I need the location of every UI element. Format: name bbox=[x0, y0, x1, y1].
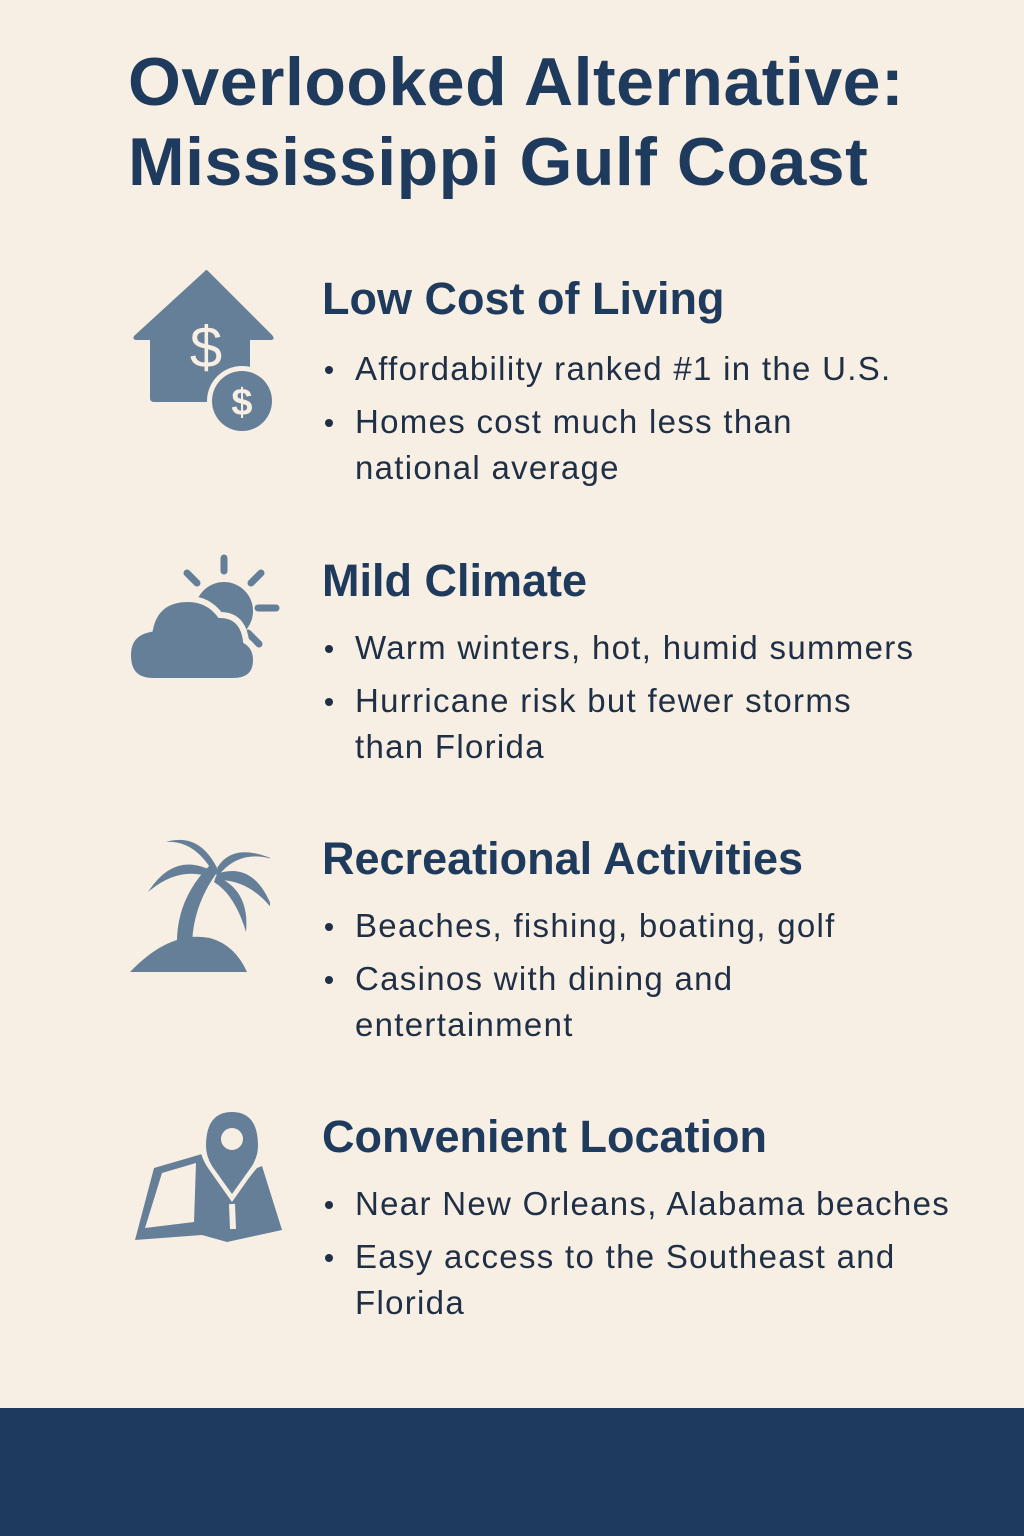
section 3 bullets bbox=[325, 907, 836, 1043]
section 3 bullets: entertainment bbox=[355, 1006, 574, 1043]
section 1 bullets: Homes cost much less than bbox=[355, 403, 793, 440]
icon: house with dollar bbox=[133, 270, 274, 431]
title: Mississippi Gulf Coast bbox=[128, 124, 868, 200]
section 4 bullets: Florida bbox=[355, 1284, 465, 1321]
section 3 heading: Recreational Activities bbox=[322, 833, 803, 884]
title: Overlooked Alternative: bbox=[128, 44, 904, 120]
icon: house with dollar: $ bbox=[231, 382, 253, 424]
section 1 bullets bbox=[325, 350, 892, 486]
section 1 bullets: national average bbox=[355, 449, 620, 486]
section 2 bullets bbox=[325, 629, 914, 765]
section 4 bullets: Near New Orleans, Alabama beaches bbox=[355, 1185, 950, 1222]
title bbox=[128, 44, 904, 200]
icon: palm tree bbox=[130, 840, 270, 972]
section 2 bullets: Hurricane risk but fewer storms bbox=[355, 682, 852, 719]
icon: sun cloud bbox=[131, 554, 280, 678]
footer band bbox=[0, 1408, 1024, 1536]
section 3 bullets: Casinos with dining and bbox=[355, 960, 733, 997]
section 4 bullets bbox=[325, 1185, 950, 1321]
section 3 bullets: Beaches, fishing, boating, golf bbox=[355, 907, 836, 944]
icon: house with dollar: $ bbox=[190, 315, 222, 380]
section 2 bullets: Warm winters, hot, humid summers bbox=[355, 629, 914, 666]
section 1 heading: Low Cost of Living bbox=[322, 273, 724, 324]
section 2 heading: Mild Climate bbox=[322, 555, 587, 606]
section 1 bullets: Affordability ranked #1 in the U.S. bbox=[355, 350, 892, 387]
section 2 bullets: than Florida bbox=[355, 728, 545, 765]
icon: map pin bbox=[135, 1112, 282, 1242]
section 4 bullets: Easy access to the Southeast and bbox=[355, 1238, 896, 1275]
section 4 heading: Convenient Location bbox=[322, 1111, 767, 1162]
